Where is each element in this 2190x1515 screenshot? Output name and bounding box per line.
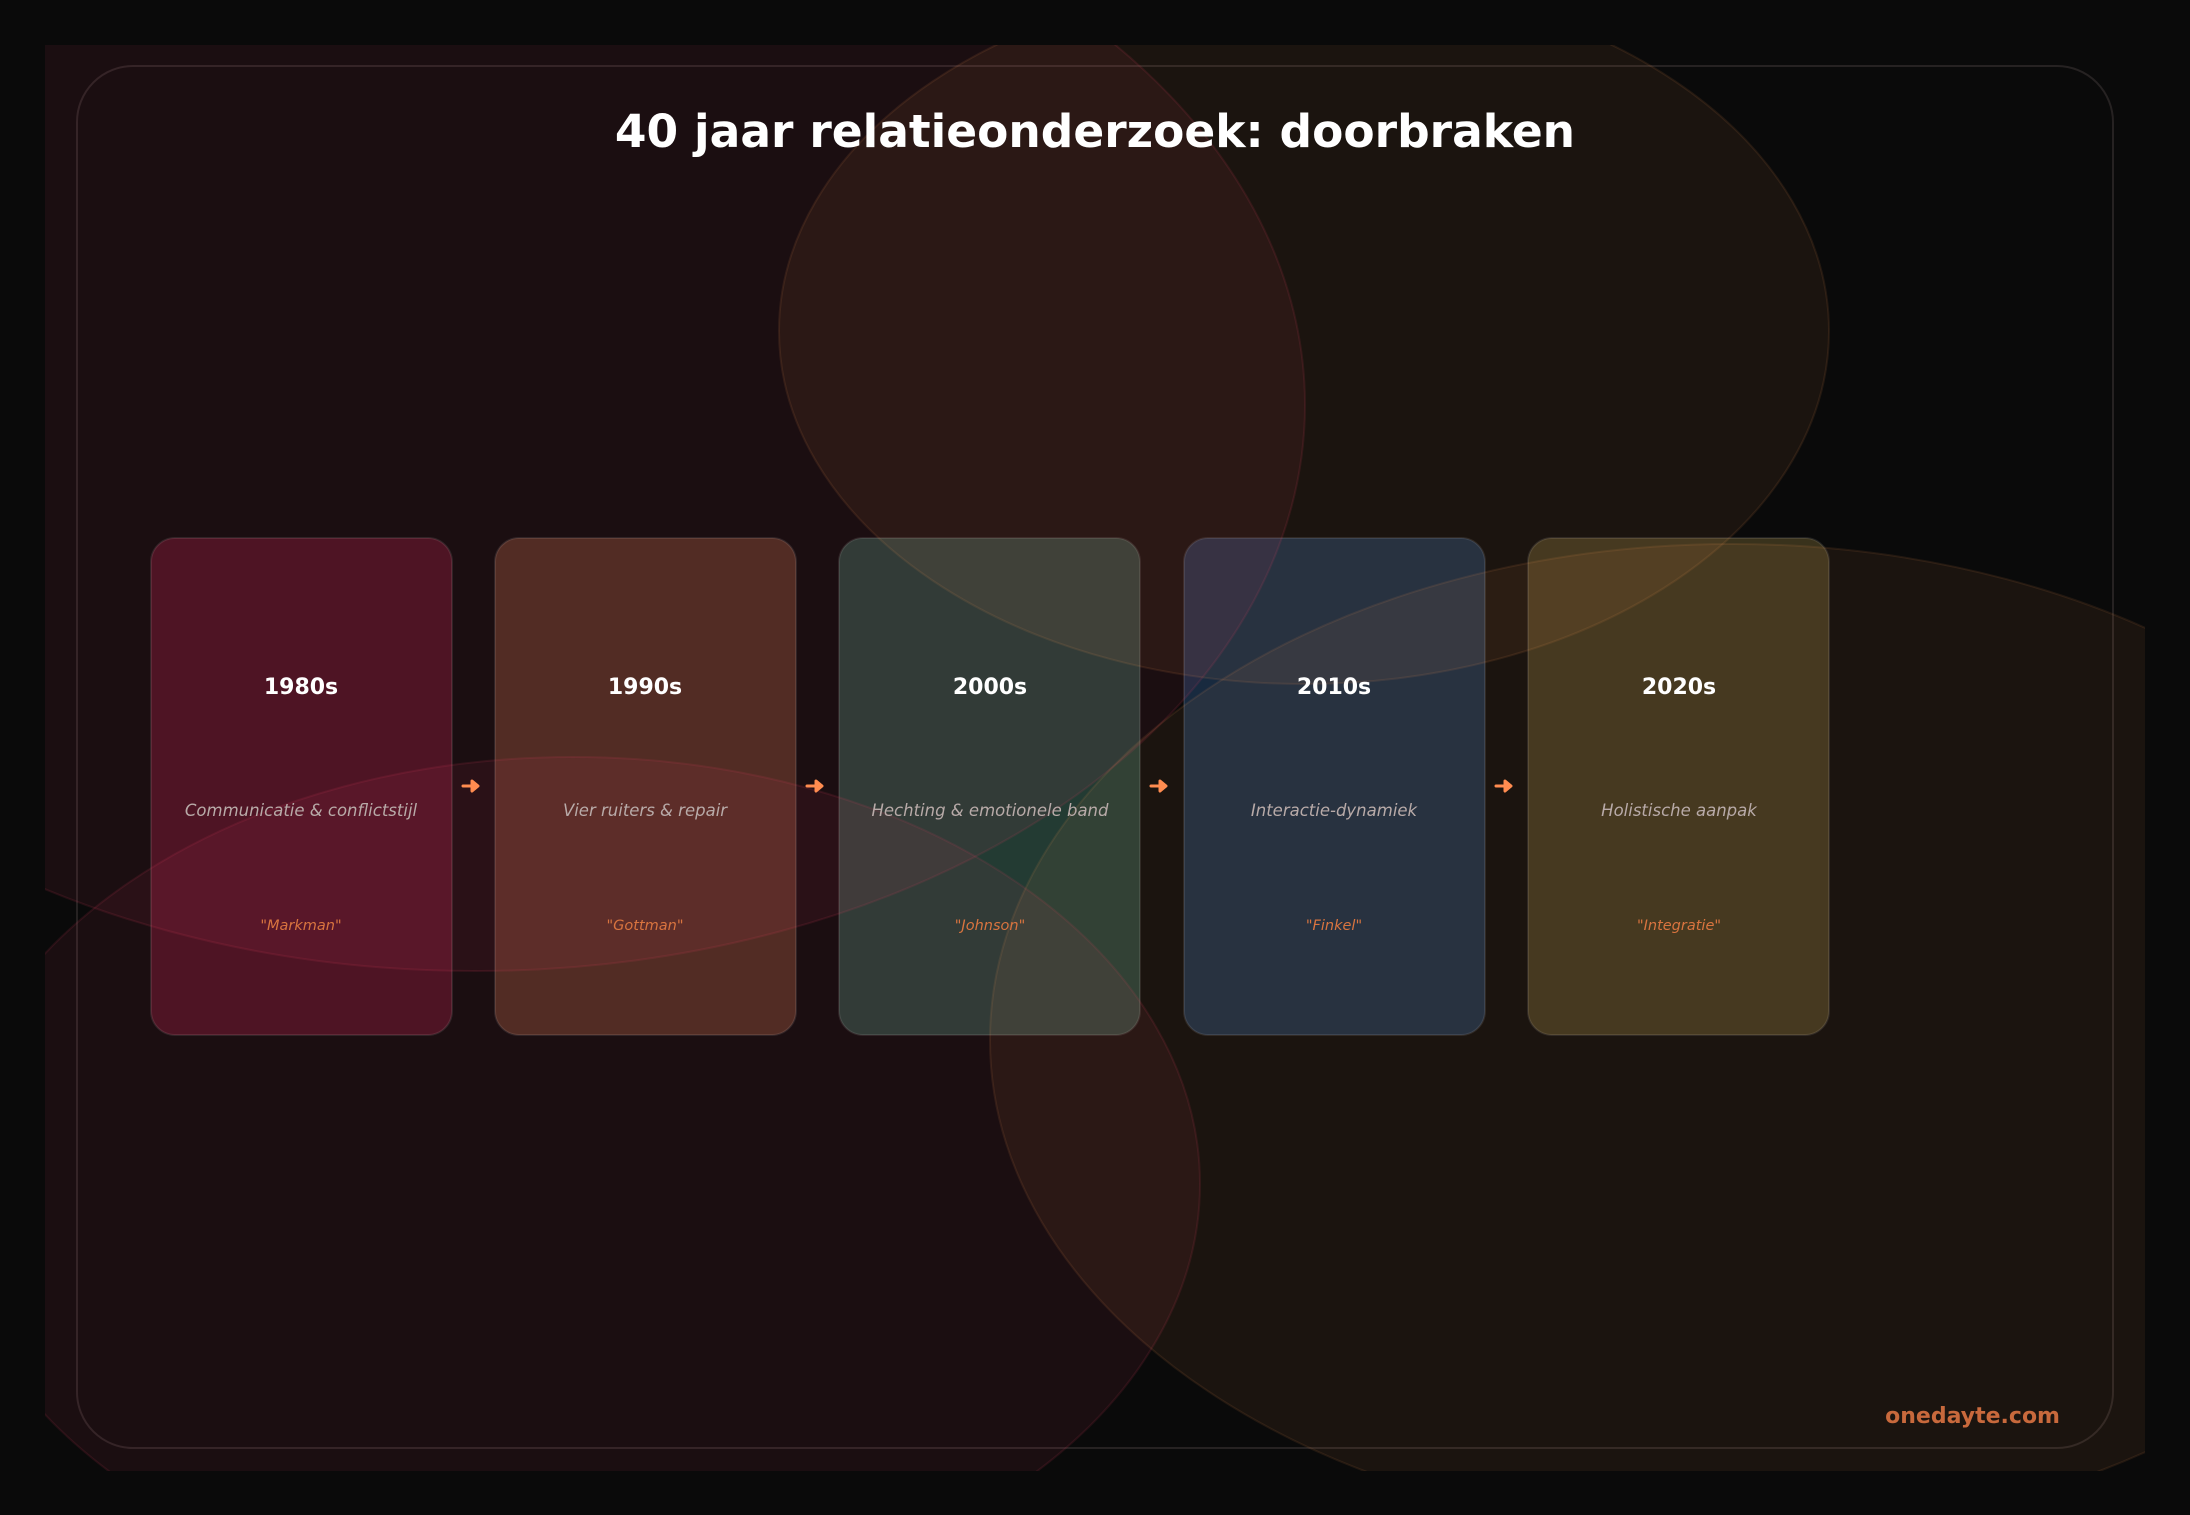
text: 2000s: 2000s <box>953 675 1027 700</box>
card: 1980s <box>151 538 452 1035</box>
text: 2020s: 2020s <box>1642 675 1716 700</box>
timeline cards <box>151 538 1829 1035</box>
text: 2010s: Interactie-dynamiek <box>1251 801 1419 820</box>
text: 2020s <box>1601 675 1758 934</box>
card: 2010s <box>1184 538 1485 1035</box>
title: 40 jaar relatieonderzoek: doorbraken <box>615 105 1575 158</box>
arrow 3 <box>1151 781 1166 791</box>
text: 2000s: Hechting & emotionele band <box>871 801 1109 820</box>
text: 2000s <box>871 675 1109 934</box>
text: 2010s: 2010s <box>1297 675 1371 700</box>
card: 2000s <box>839 538 1140 1035</box>
text: 1980s: "Markman" <box>260 918 342 934</box>
card: 2020s <box>1528 538 1829 1035</box>
arrow 1 <box>463 781 478 791</box>
text: 1980s <box>185 675 418 934</box>
text: 2020s: "Integratie" <box>1637 918 1721 934</box>
text: 1990s: Vier ruiters & repair <box>563 801 728 820</box>
text: 2020s: Holistische aanpak <box>1601 801 1758 820</box>
arrow 4 <box>1496 781 1511 791</box>
text: 2010s: "Finkel" <box>1306 918 1362 934</box>
text: 1990s: 1990s <box>608 675 682 700</box>
card: 1990s <box>495 538 796 1035</box>
arrow 2 <box>807 781 822 791</box>
card texts <box>185 675 1758 934</box>
text: 1990s <box>563 675 728 934</box>
arrows <box>463 781 1511 791</box>
footer brand: onedayte.com <box>1885 1404 2060 1429</box>
text: 1980s: 1980s <box>264 675 338 700</box>
text: 1990s: "Gottman" <box>606 918 684 934</box>
text: 1980s: Communicatie & conflictstijl <box>185 801 418 820</box>
text: 2010s <box>1251 675 1419 934</box>
text: 2000s: "Johnson" <box>955 918 1025 934</box>
